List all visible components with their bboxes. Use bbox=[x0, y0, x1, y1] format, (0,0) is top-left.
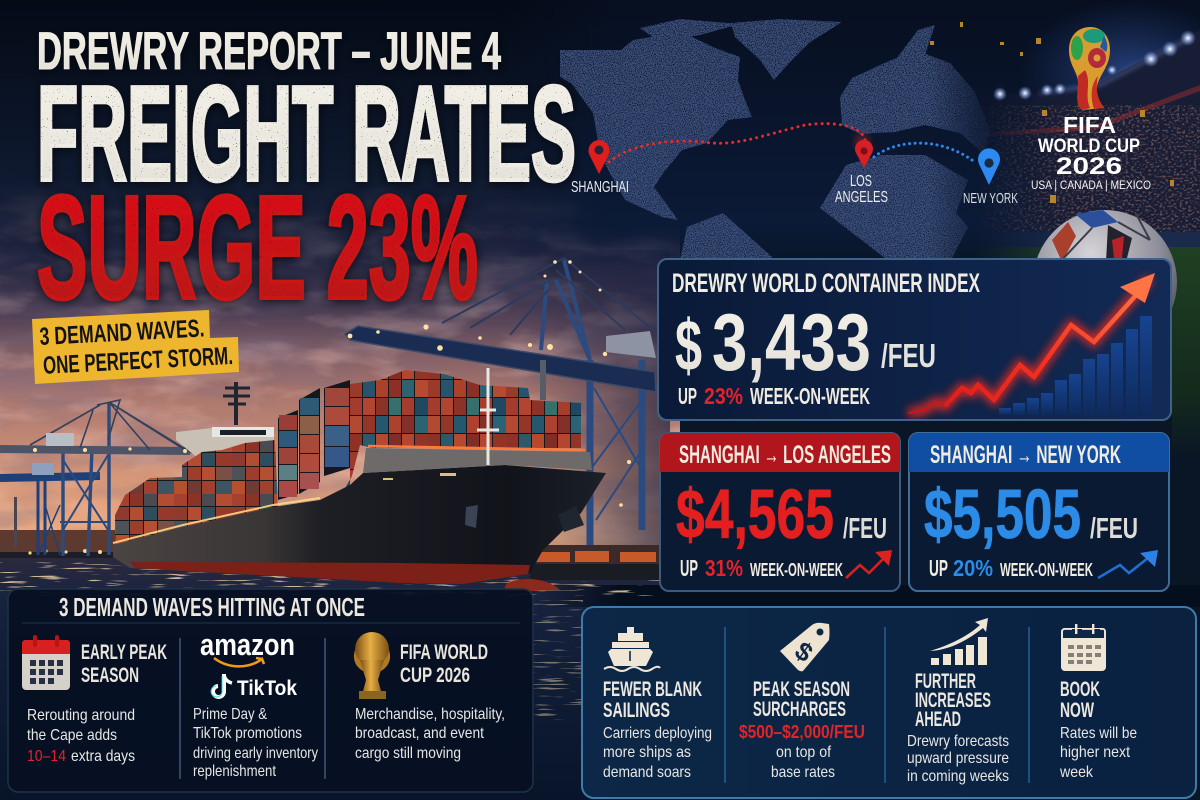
description bbox=[603, 725, 712, 781]
ship: far containers bbox=[115, 440, 278, 545]
pin: Shanghai bbox=[589, 140, 610, 174]
icon: soccer ball bbox=[1033, 210, 1177, 354]
heading: NOW bbox=[1060, 699, 1094, 722]
description: base rates bbox=[771, 764, 835, 781]
map land masses bbox=[560, 19, 990, 260]
surcharge range: $500–$2,000/FEU bbox=[739, 722, 865, 742]
route name: SHANGHAI → LOS ANGELES bbox=[679, 441, 891, 469]
heading: EARLY PEAK bbox=[81, 641, 167, 664]
ship: superstructure bbox=[176, 382, 274, 470]
panel: Shanghai to Los Angeles bbox=[660, 433, 900, 591]
mini trend arrow bbox=[846, 550, 892, 578]
description: broadcast, and event bbox=[355, 725, 484, 742]
heading bbox=[81, 641, 167, 687]
icon: price tag: $ bbox=[789, 635, 819, 668]
front container columns bbox=[278, 380, 350, 500]
arrow glow bbox=[908, 278, 1150, 413]
text: 2026: 2026 bbox=[1056, 153, 1122, 180]
heading: CUP 2026 bbox=[400, 664, 470, 687]
description bbox=[771, 744, 835, 781]
icon: rising bars and arrow bbox=[930, 618, 988, 665]
heading bbox=[400, 641, 488, 687]
heading: SAILINGS bbox=[603, 699, 670, 722]
pin: Los Angeles bbox=[855, 140, 873, 168]
quay, right bbox=[530, 460, 660, 580]
description: in coming weeks bbox=[907, 768, 1009, 785]
week-on-week change bbox=[929, 555, 1093, 581]
world map with shipping routes bbox=[560, 19, 1018, 260]
panel: 3 demand waves hitting at once bbox=[8, 589, 533, 792]
column: further increases ahead bbox=[907, 618, 1009, 785]
icon: golden trophy bbox=[354, 632, 390, 699]
red route Shanghai to Los Angeles bbox=[609, 124, 874, 162]
header bar bbox=[909, 433, 1169, 472]
heading: FIFA WORLD bbox=[400, 641, 488, 664]
description: Merchandise, hospitality, bbox=[355, 706, 505, 723]
description: week bbox=[1059, 764, 1094, 781]
heading: INCREASES bbox=[915, 689, 991, 712]
logo: TikTok bbox=[211, 674, 297, 700]
description: Prime Day & bbox=[193, 706, 267, 723]
week-on-week change: UP bbox=[680, 555, 698, 581]
heading: SURCHARGES bbox=[753, 698, 846, 721]
panel heading: 3 DEMAND WAVES HITTING AT ONCE bbox=[59, 592, 365, 622]
heading: FEWER BLANK bbox=[603, 678, 702, 701]
description: demand soars bbox=[603, 764, 691, 781]
panel: outlook and action items bbox=[582, 607, 1196, 798]
logo: TikTok: TikTok bbox=[237, 677, 297, 700]
main value: $ bbox=[675, 306, 702, 386]
column: book now bbox=[1059, 624, 1137, 781]
header bar bbox=[660, 433, 900, 472]
title: Surge 23%: SURGE 23% bbox=[37, 166, 478, 330]
main value: 3,433 bbox=[712, 298, 871, 388]
week-on-week change: WEEK-ON-WEEK bbox=[750, 560, 843, 580]
icon: FIFA trophy emblem bbox=[1069, 27, 1110, 110]
label: Los Angeles: LOS bbox=[850, 173, 872, 190]
label: Shanghai: SHANGHAI bbox=[571, 179, 629, 196]
heading: SEASON bbox=[81, 664, 139, 687]
heading: AHEAD bbox=[915, 708, 961, 731]
description: replenishment bbox=[193, 763, 276, 780]
description: driving early inventory bbox=[193, 745, 318, 762]
text: FIFA: FIFA bbox=[1063, 112, 1116, 138]
week-on-week change: WEEK-ON-WEEK bbox=[750, 383, 870, 409]
water bbox=[0, 555, 1200, 800]
week-on-week change: 31% bbox=[705, 555, 743, 581]
label: Los Angeles bbox=[835, 173, 888, 206]
description bbox=[27, 707, 135, 765]
description: Drewry forecasts bbox=[907, 733, 1009, 750]
column: fewer blank sailings bbox=[603, 627, 712, 781]
mini trend arrow bbox=[1098, 550, 1158, 578]
icon: calendar bbox=[22, 635, 70, 690]
description: TikTok promotions bbox=[193, 725, 302, 742]
description: extra days bbox=[71, 748, 135, 765]
week-on-week change bbox=[678, 383, 870, 409]
unit: /FEU bbox=[1090, 513, 1138, 545]
crane: left bbox=[0, 400, 192, 556]
crane: right, large bbox=[345, 258, 656, 545]
callout: 3 demand waves, one perfect storm bbox=[32, 310, 239, 384]
week-on-week change: 20% bbox=[953, 555, 993, 581]
text: host countries: USA | CANADA | MEXICO bbox=[1031, 180, 1151, 192]
description: higher next bbox=[1060, 744, 1130, 761]
heading bbox=[1060, 678, 1100, 722]
week-on-week change: UP bbox=[678, 383, 697, 409]
unit: /FEU bbox=[843, 513, 887, 545]
description bbox=[1059, 725, 1137, 781]
description: on top of bbox=[776, 744, 831, 761]
bars bbox=[999, 316, 1152, 415]
column: FIFA World Cup 2026 bbox=[354, 632, 505, 762]
description: more ships as bbox=[603, 744, 691, 761]
stadium backdrop bbox=[930, 0, 1200, 460]
description: Rates will be bbox=[1060, 725, 1137, 742]
FIFA World Cup 2026 logo bbox=[1031, 27, 1151, 192]
description: 10–14 bbox=[27, 748, 66, 765]
week-on-week change: WEEK-ON-WEEK bbox=[1000, 560, 1093, 580]
rising index chart bbox=[908, 273, 1155, 415]
week-on-week change bbox=[680, 555, 843, 581]
callout: 3 demand waves, one perfect storm: 3 DEMAND WAVES. bbox=[39, 314, 205, 351]
heading: PEAK SEASON bbox=[753, 678, 850, 701]
description: upward pressure bbox=[907, 750, 1009, 767]
heading: FURTHER bbox=[915, 670, 976, 693]
panel: Shanghai to New York bbox=[909, 433, 1169, 591]
value: $4,565 bbox=[676, 475, 834, 553]
description: cargo still moving bbox=[355, 745, 461, 762]
value: $5,505 bbox=[924, 475, 1081, 553]
heading bbox=[915, 670, 991, 731]
main value bbox=[675, 298, 871, 388]
ship: hull bbox=[113, 368, 606, 592]
column: Amazon and TikTok bbox=[193, 627, 318, 780]
crane: far left bbox=[0, 463, 100, 555]
pin: New York bbox=[978, 148, 1000, 185]
week-on-week change: UP bbox=[929, 555, 948, 581]
description bbox=[355, 706, 505, 762]
label: New York: NEW YORK bbox=[963, 190, 1018, 207]
description: the Cape adds bbox=[27, 727, 117, 744]
description bbox=[907, 733, 1009, 785]
panel: Drewry World Container Index bbox=[658, 259, 1171, 420]
title: Drewry Report - June 4: DREWRY REPORT – JUNE 4 bbox=[37, 22, 501, 81]
harbour scene bbox=[0, 258, 1200, 800]
ship: container stacks bbox=[278, 370, 581, 500]
quay and port lights, left bbox=[0, 497, 118, 558]
logo: amazon: amazon bbox=[200, 627, 295, 662]
column: peak season surcharges bbox=[739, 623, 865, 781]
description bbox=[193, 706, 318, 780]
icon: calendar bbox=[1061, 624, 1106, 671]
text: World Cup: WORLD CUP bbox=[1038, 136, 1140, 157]
unit: /FEU bbox=[881, 337, 936, 374]
blue route Los Angeles to New York bbox=[874, 143, 976, 163]
week-on-week change: 23% bbox=[704, 383, 743, 409]
description: Carriers deploying bbox=[603, 725, 712, 742]
icon: ship bbox=[604, 627, 660, 671]
column: early peak season bbox=[22, 635, 167, 765]
arrow bbox=[908, 273, 1155, 413]
label: Los Angeles: ANGELES bbox=[835, 189, 888, 206]
title: Freight Rates: FREIGHT RATES bbox=[37, 58, 576, 209]
icon: price tag bbox=[780, 623, 830, 671]
heading bbox=[603, 678, 702, 722]
description: Rerouting around bbox=[27, 707, 135, 724]
panel heading: DREWRY WORLD CONTAINER INDEX bbox=[672, 268, 980, 298]
heading bbox=[753, 678, 850, 721]
heading: BOOK bbox=[1060, 678, 1100, 701]
callout: 3 demand waves, one perfect storm: ONE PERFECT STORM. bbox=[42, 342, 234, 380]
